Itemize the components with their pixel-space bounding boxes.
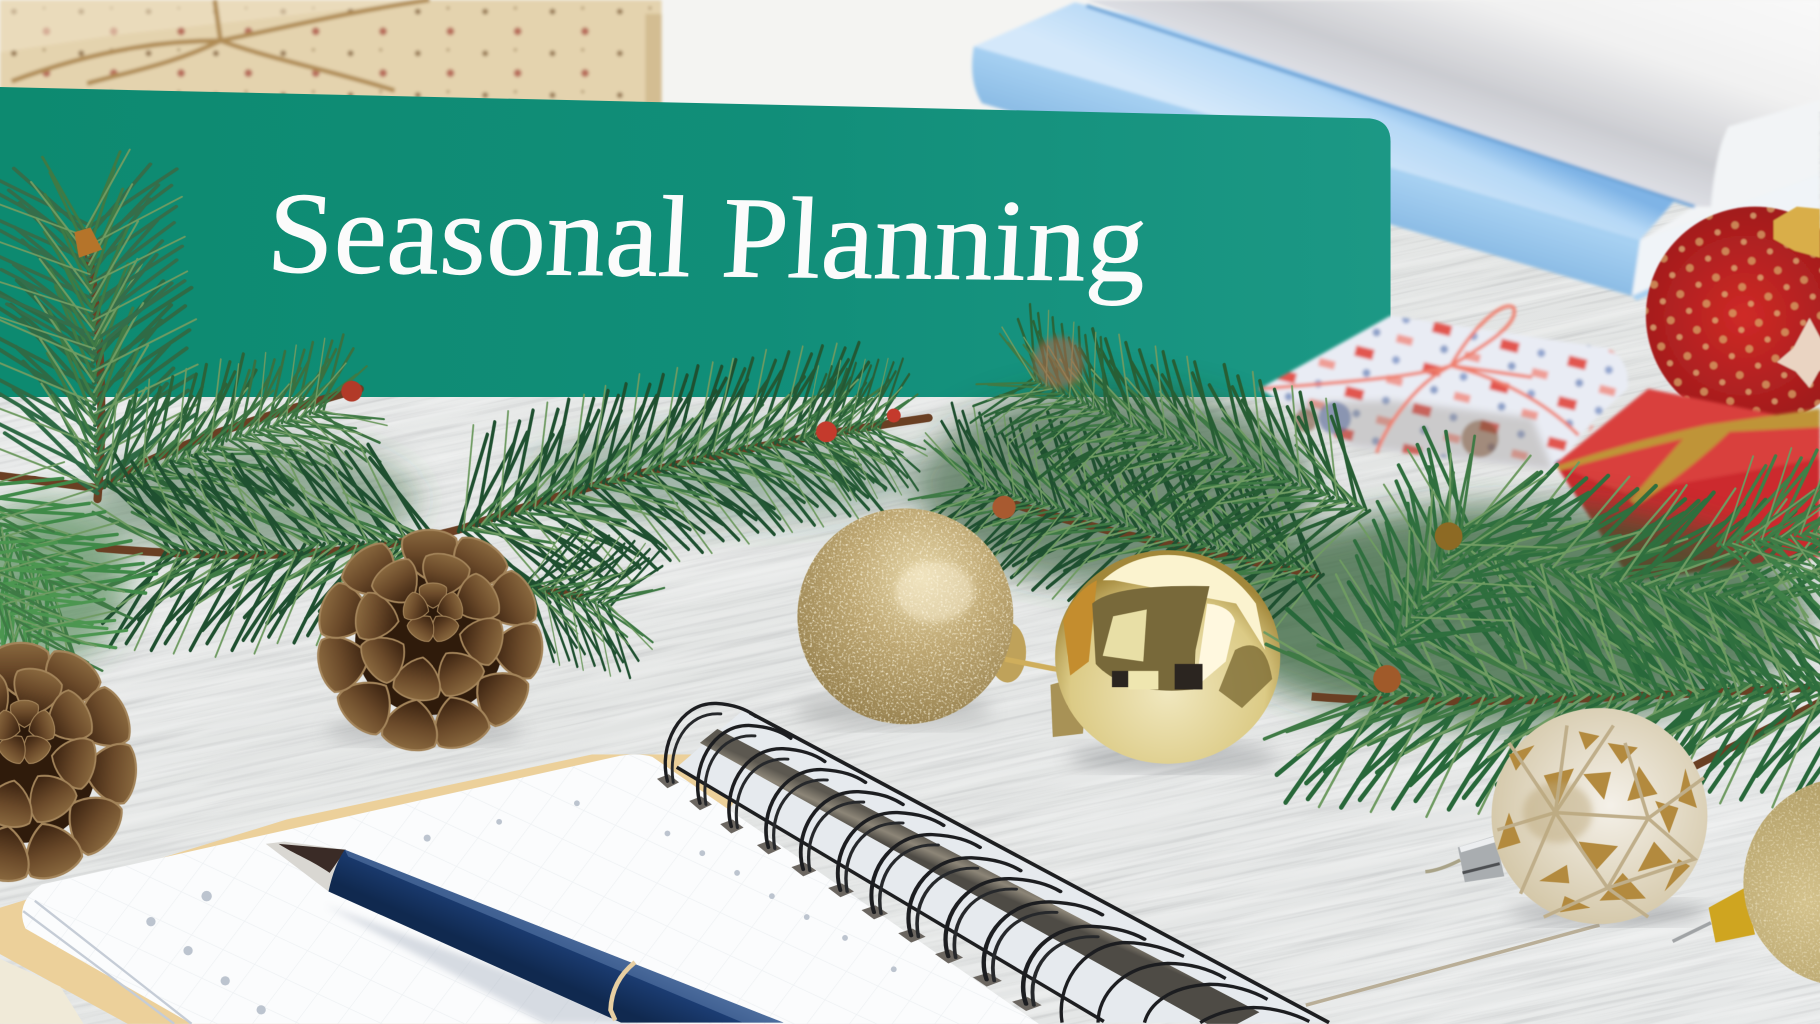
notebook tan board bbox=[0, 754, 743, 1024]
spiral tube bbox=[700, 729, 1259, 1024]
branch: lower left bbox=[0, 425, 445, 747]
blue book front bbox=[972, 46, 1640, 296]
glitter gold bauble bbox=[795, 508, 1026, 729]
pen bbox=[266, 842, 783, 1024]
branch: centre long bbox=[429, 331, 932, 683]
shiny gold bauble bbox=[1005, 550, 1280, 772]
notebook dots bbox=[146, 800, 897, 1014]
partial gold bauble bottom right bbox=[1673, 778, 1820, 987]
branch: upper left vertical bbox=[0, 146, 202, 497]
white book cover bbox=[1086, 0, 1820, 207]
pine branch: lower right foreground bbox=[1261, 406, 1820, 819]
branch: upper left diagonal bbox=[75, 324, 398, 566]
branch: centre right bbox=[895, 295, 1401, 665]
spiral backing bbox=[677, 710, 1329, 1023]
notebook bbox=[0, 703, 1329, 1024]
title: Seasonal Planning bbox=[264, 170, 1150, 307]
patterned gift with pink ribbon bbox=[1259, 306, 1628, 470]
pine cone centre bbox=[313, 530, 545, 755]
patterned bauble bbox=[1425, 708, 1707, 925]
notebook left page bbox=[22, 754, 1039, 1024]
wrapped gift top left bbox=[0, 0, 662, 107]
blue book pages bbox=[1632, 174, 1820, 296]
stacked blue and white books bbox=[972, 0, 1820, 301]
green banner bbox=[0, 87, 1391, 397]
spiral binding bbox=[657, 703, 1329, 1023]
foliage depth shading bbox=[0, 389, 1811, 725]
red bauble top right bbox=[1646, 207, 1820, 425]
pine branches behind ornaments bbox=[0, 146, 1811, 747]
white book pages bbox=[1640, 100, 1820, 240]
pine cone left bbox=[0, 643, 139, 886]
blue book cover top bbox=[974, 2, 1718, 240]
red gift with gold ribbon bbox=[1555, 389, 1820, 580]
